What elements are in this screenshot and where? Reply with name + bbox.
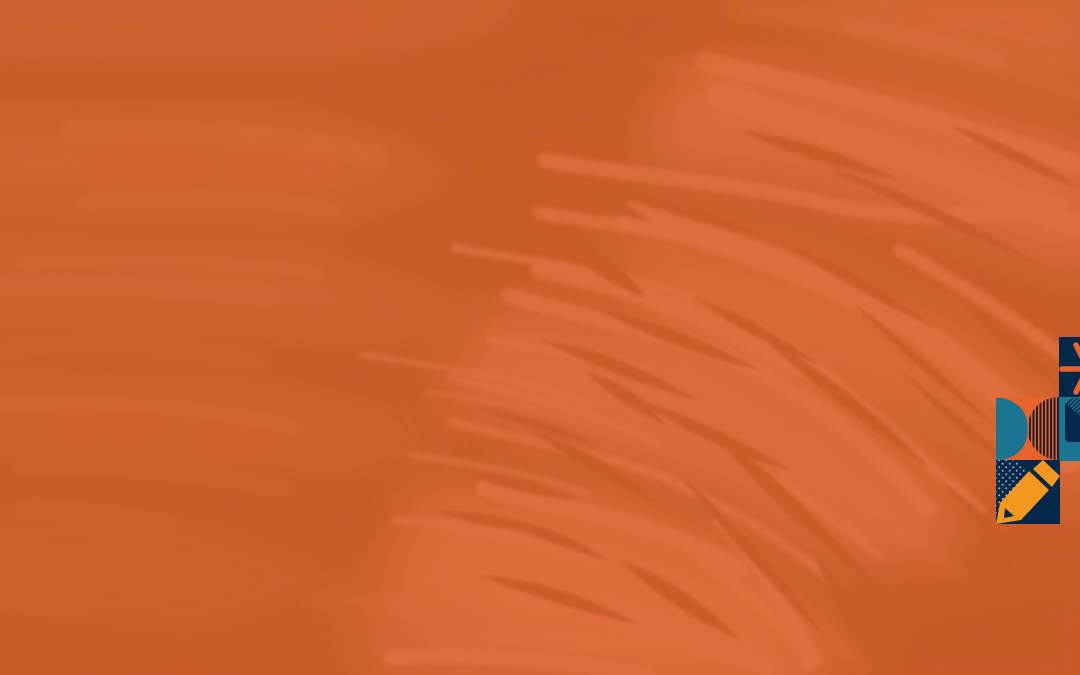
tapered dark streaks <box>430 125 1080 675</box>
dotted quarter circle <box>996 460 1027 514</box>
icon: pencil <box>996 460 1060 524</box>
tile: teal with navy rounded panel <box>1059 397 1080 461</box>
tile: navy with orange asterisk <box>1059 337 1080 397</box>
tile: teal half circle and striped circle on orange <box>996 397 1059 461</box>
crisp light strokes <box>362 62 1080 675</box>
dark soft regions <box>440 0 1080 675</box>
central light masses <box>330 60 1080 675</box>
decorative geometric tile cluster <box>996 337 1080 524</box>
tile: navy with dotted quarter and orange pencil <box>996 460 1060 524</box>
